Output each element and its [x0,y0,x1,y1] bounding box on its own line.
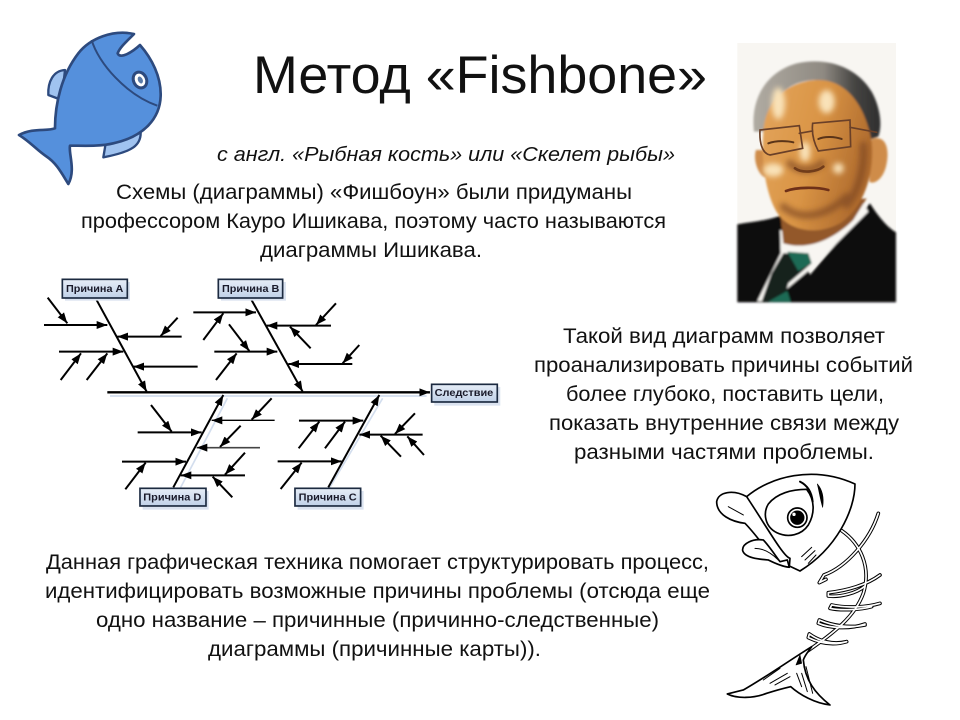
face highlights [763,87,844,177]
text block: origin of the diagrams: профессором Кауро Ишикава, поэтому часто называются [81,209,666,233]
photo: Kaoru Ishikawa portrait [737,43,896,302]
main spine [107,389,430,396]
title: Метод «Fishbone» [253,46,707,105]
label: cause D: Причина D [143,492,201,503]
text block: benefits of the diagram: разными частями проблемы. [574,440,874,464]
shirt [757,203,868,302]
branch: cause A [44,298,198,392]
icon: cartoon fish skeleton [717,474,880,705]
branch: cause B [193,298,359,392]
label: cause A [62,279,130,301]
label: cause B [218,279,286,301]
head [717,474,855,571]
branch: cause C [278,395,424,489]
label: cause C: Причина С [299,492,357,503]
text block: benefits of the diagram [534,324,913,464]
text block: technique description: одно название – причинные (причинно-следственные) [96,608,659,632]
label: cause B: Причина В [222,284,279,295]
hair [753,61,880,142]
suit [737,203,896,302]
neck [780,198,867,246]
text block: technique description: диаграммы (причинные карты)). [208,637,541,661]
label: effect: Следствие [435,388,494,399]
icon: blue fish [19,33,161,184]
chart: fishbone diagram [44,279,500,510]
text block: benefits of the diagram: более глубоко, поставить цели, [566,382,884,406]
ears [755,138,888,183]
text block: origin of the diagrams: Схемы (диаграммы) «Фишбоун» были придуманы [116,180,632,204]
text block: origin of the diagrams: диаграммы Ишикава. [260,238,482,262]
text block: benefits of the diagram: Такой вид диаграмм позволяет [563,324,885,348]
label: cause D [140,488,209,510]
text block: benefits of the diagram: показать внутренние связи между [549,411,899,435]
tie [762,253,812,302]
text block: technique description: Данная графическая техника помогает структурировать процесс, [46,550,709,574]
label: effect [432,384,500,406]
text block: technique description: идентифицировать возможные причины проблемы (отсюда еще [45,579,710,603]
label: cause A: Причина А [66,284,123,295]
subtitle: с англ. «Рыбная кость» или «Скелет рыбы» [217,143,675,166]
text block: origin of the diagrams [81,180,666,262]
label: cause C [295,488,364,510]
facial features [760,120,877,215]
tail [727,647,830,705]
face [763,80,872,230]
text block: benefits of the diagram: проанализировать причины событий [534,353,913,377]
spine and ribs [807,513,880,652]
branch: cause D [122,395,275,497]
bone shadows [110,396,427,490]
text block: technique description [45,550,710,661]
